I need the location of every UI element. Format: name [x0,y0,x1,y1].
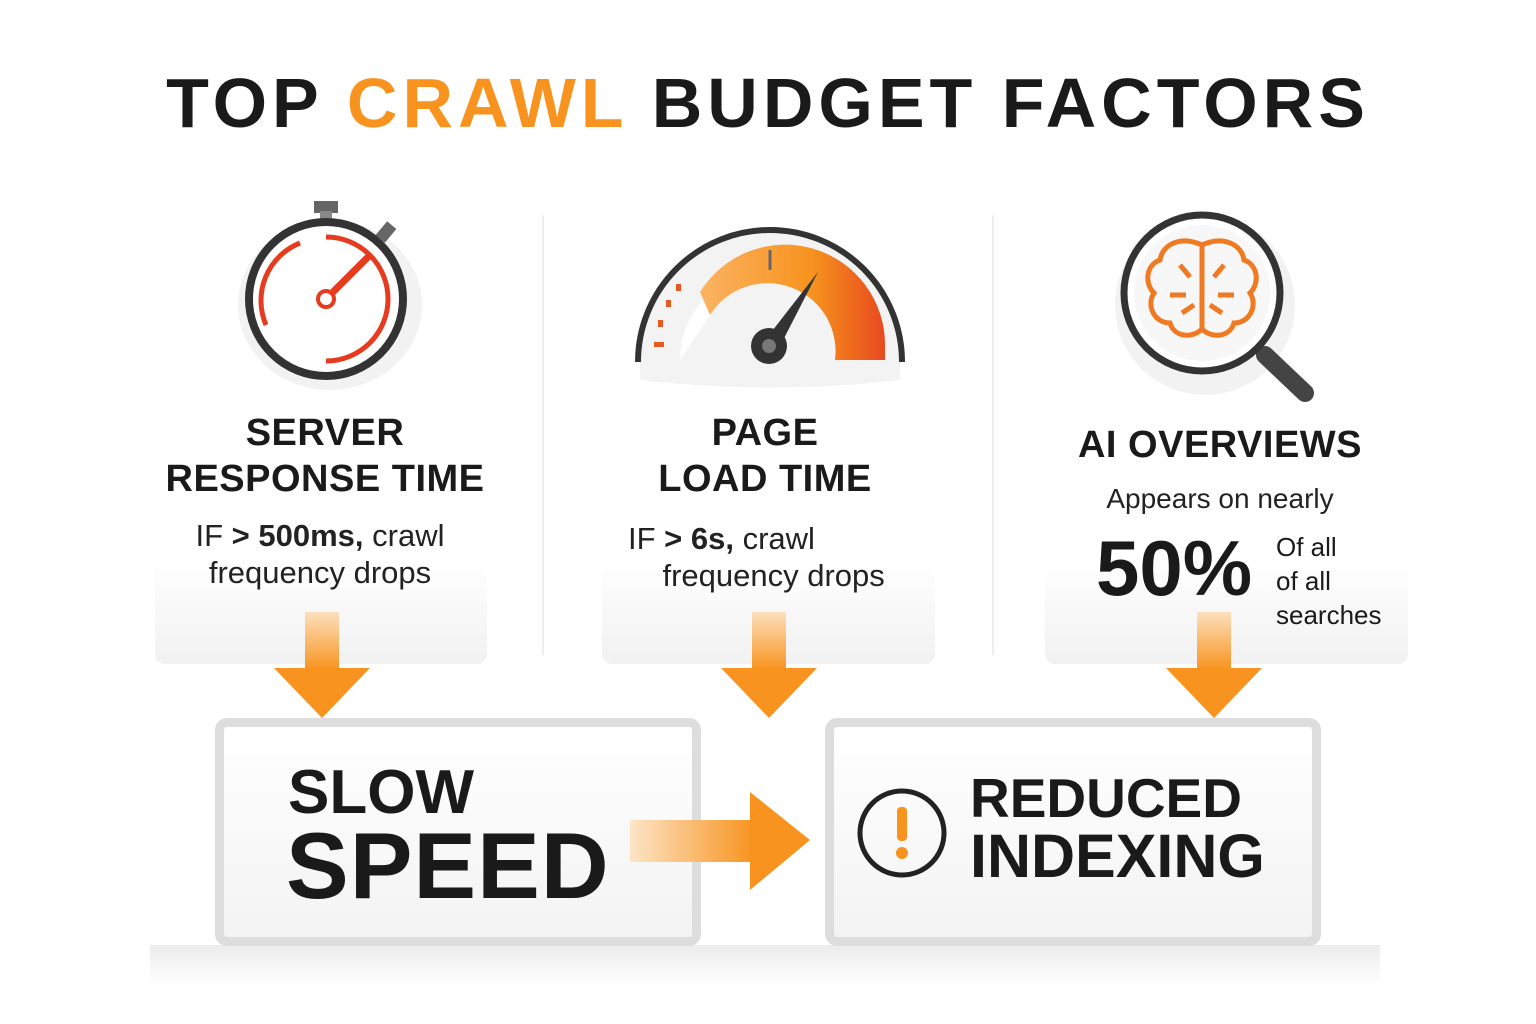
box: reduced indexing [825,718,1321,946]
icon: warning [858,788,946,878]
icon: gauge [635,227,905,388]
text: ai overviews stat: 50% [1096,524,1252,612]
heading: server response time [166,412,484,500]
text: ai overviews stat: Of all [1276,532,1337,562]
text: ai overviews stat: Appears on nearly [1106,483,1334,514]
icon: magnifier brain [1115,212,1314,402]
icon: stopwatch [238,201,422,390]
text: ai overviews stat: of all [1276,566,1331,596]
text: ai overviews stat [1096,483,1382,630]
heading: page load time: PAGE [712,412,818,454]
heading: server response time: RESPONSE TIME [166,458,484,500]
text: server [196,518,444,590]
heading: ai overviews: AI OVERVIEWS [1078,424,1362,466]
box: slow speed: SPEED [286,813,610,918]
box: reduced indexing: REDUCED [970,767,1242,829]
text: server: frequency drops [209,555,431,590]
text: server: IF > 500ms, crawl [196,518,444,553]
title: TOP CRAWL BUDGET FACTORS [166,64,1370,142]
panel: page load [602,560,935,664]
text: page load: frequency drops [662,558,885,593]
box: slow speed [215,718,701,946]
heading: page load time: LOAD TIME [658,458,872,500]
arrow: down 3 [1166,612,1262,718]
text: page load [628,521,885,593]
heading: server response time: SERVER [246,412,404,454]
text: ai overviews stat: searches [1276,600,1382,630]
arrow: down 2 [721,612,817,718]
panel: ai overviews [1045,560,1408,664]
arrow: down 1 [274,612,370,718]
text: page load: IF > 6s, crawl [628,521,815,556]
arrow: right [630,792,810,890]
heading: page load time [658,412,872,500]
box: reduced indexing: INDEXING [970,822,1265,890]
panel: server response [155,560,487,664]
box: slow speed: SLOW [288,758,474,827]
